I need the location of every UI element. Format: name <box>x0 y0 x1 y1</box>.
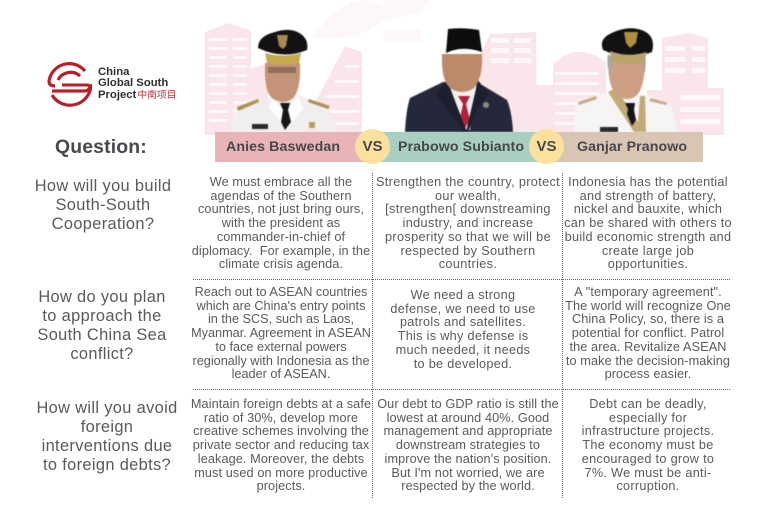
answer: Anies on foreign debts: must used on more productive <box>194 466 368 480</box>
question 2: South China Sea <box>37 326 167 344</box>
heading: Question: Question: <box>55 136 147 158</box>
name: Ganjar Pranowo: Ganjar Pranowo <box>577 139 687 155</box>
answer: Ganjar on foreign debts: encouraged to grow to <box>582 452 714 466</box>
question 1 <box>35 177 171 233</box>
name: Prabowo Subianto: Prabowo Subianto <box>398 139 524 155</box>
answer: Anies on South China Sea: Myanmar. Agreement in ASEAN <box>191 326 371 340</box>
answer: Prabowo on South-South: [strengthen[ downstreaming <box>385 202 551 216</box>
answer: Ganjar on South-South <box>564 175 732 271</box>
answer: Prabowo on South China Sea: defense, we need to use <box>390 302 536 316</box>
question 3: How will you avoid <box>36 399 178 417</box>
question 2: to approach the <box>42 307 162 325</box>
answer: Ganjar on South-South: build economic strength and <box>565 230 731 244</box>
answer: Prabowo on South China Sea: to be developed. <box>414 357 512 371</box>
portrait: Anies Baswedan <box>232 29 336 132</box>
answer: Anies on South China Sea <box>191 285 371 381</box>
logo text: Global South <box>98 77 168 89</box>
answer: Prabowo on foreign debts: Our debt to GDP ratio is still the <box>377 397 559 411</box>
question 2 <box>37 288 167 363</box>
answer: Prabowo on South-South: Strengthen the country, protect <box>376 175 560 189</box>
answer: Ganjar on South-South: nickel and bauxite, which <box>574 202 722 216</box>
question 3 <box>36 399 178 474</box>
question 3: to foreign debts? <box>43 456 171 474</box>
icon: logo mark <box>47 62 92 107</box>
answer: Prabowo on South-South: prosperity so that we will be <box>385 230 551 244</box>
answer: Prabowo on South China Sea: We need a strong <box>411 288 515 302</box>
answer: Anies on South-South <box>192 175 370 271</box>
answer: Ganjar on foreign debts <box>582 397 714 493</box>
name bar: Anies Baswedan <box>215 132 370 162</box>
answer: Prabowo on South-South: industry, and increase <box>403 216 533 230</box>
answer: Prabowo on foreign debts: improve the nation's position. <box>385 452 551 466</box>
name: Anies Baswedan: Anies Baswedan <box>226 139 340 155</box>
portrait: Prabowo Subianto <box>404 27 514 132</box>
answer: Ganjar on South China Sea: China Policy, so, there is a <box>572 312 724 326</box>
answer: Prabowo on foreign debts <box>377 397 559 493</box>
answer: Prabowo on South-South: countries. <box>439 257 497 271</box>
answer: Anies on South China Sea: which are China's entry points <box>197 299 365 313</box>
answer: Ganjar on South China Sea: The world will recognize One <box>565 299 731 313</box>
answer: Anies on South China Sea: Reach out to ASEAN countries <box>195 285 367 299</box>
answer: Anies on South-South: climate crisis agenda. <box>219 257 343 271</box>
answer: Anies on South-South: countries, not just bring ours, <box>198 202 364 216</box>
answer: Prabowo on South China Sea: patrols and satellites. <box>400 315 526 329</box>
answer: Anies on South-South: diplomacy. For example, in the <box>192 244 370 258</box>
answer: Anies on South-South: agendas of the Southern <box>210 189 352 203</box>
answer: Ganjar on South China Sea <box>565 285 731 381</box>
answer: Anies on foreign debts: leakage. Moreover, the debts <box>198 452 364 466</box>
logo text: Project中南项目 <box>98 87 176 101</box>
answer: Anies on foreign debts: private sector and reducing tax <box>193 438 369 452</box>
answer: Ganjar on South China Sea: potential for conflict. Patrol <box>572 326 724 340</box>
answer: Ganjar on South China Sea: to make the decision-making <box>566 354 730 368</box>
answer: Ganjar on South China Sea: A "temporary agreement". <box>574 285 722 299</box>
answer: Anies on South China Sea: to face external powers <box>215 340 347 354</box>
question 1: Cooperation? <box>52 215 154 233</box>
answer: Anies on foreign debts: Maintain foreign debts at a safe <box>191 397 371 411</box>
VS badge left <box>355 129 390 164</box>
answer: Anies on South China Sea: leader of ASEAN. <box>232 367 330 381</box>
answer: Anies on foreign debts: projects. <box>257 479 305 493</box>
name bar: Prabowo Subianto <box>370 132 546 162</box>
question 2: How do you plan <box>38 288 166 306</box>
answer: Anies on foreign debts <box>191 397 371 493</box>
answer: Ganjar on South China Sea: the area. Revitalize ASEAN <box>569 340 727 354</box>
logo text <box>98 66 176 101</box>
answer: Ganjar on South-South: opportunities. <box>608 257 688 271</box>
question 1: How will you build <box>35 177 171 195</box>
name bar: Ganjar Pranowo <box>546 132 703 162</box>
answer: Prabowo on South-South: respected by Southern <box>400 244 536 258</box>
answer: Anies on South China Sea: in the SCS, such as Laos, <box>208 312 354 326</box>
answer: Ganjar on foreign debts: The economy must be <box>582 438 714 452</box>
VS badge right <box>529 129 564 164</box>
answer: Prabowo on foreign debts: management and appropriate <box>383 424 553 438</box>
answer: Ganjar on South-South: can be shared with others to <box>564 216 732 230</box>
answer: Prabowo on foreign debts: downstream strategies to <box>396 438 540 452</box>
answer: Ganjar on South-South: Indonesia has the potential <box>568 175 728 189</box>
question 1: South-South <box>56 196 150 214</box>
answer: Ganjar on foreign debts: 7%. We must be anti- <box>584 466 712 480</box>
answer: Ganjar on South China Sea: process easier. <box>605 367 691 381</box>
answer: Prabowo on foreign debts: But I'm not worried, we are <box>391 466 545 480</box>
answer: Anies on South-South: with the president as <box>222 216 340 230</box>
answer: Prabowo on foreign debts: respected by the world. <box>401 479 535 493</box>
answer: Prabowo on South China Sea <box>390 288 536 371</box>
logo text: China <box>98 66 129 78</box>
question 3: interventions due <box>42 437 172 455</box>
VS badge left: VS <box>362 138 382 155</box>
answer: Prabowo on South China Sea: much needed, it needs <box>396 343 530 357</box>
answer: Anies on South-South: We must embrace all the <box>210 175 352 189</box>
background city skyline <box>205 23 724 135</box>
answer: Anies on foreign debts: creative schemes involving the <box>193 424 369 438</box>
question 2: conflict? <box>70 345 134 363</box>
answer: Ganjar on foreign debts: infrastructure projects. <box>582 424 714 438</box>
answer: Ganjar on South-South: and strength of battery, <box>580 189 716 203</box>
answer: Anies on South China Sea: regionally with Indonesia as the <box>192 354 370 368</box>
logo: China Global South Project <box>47 62 176 107</box>
question 3: foreign <box>81 418 133 436</box>
answer: Prabowo on South-South: our wealth, <box>435 189 501 203</box>
VS badge right: VS <box>536 138 556 155</box>
answer: Prabowo on foreign debts: lowest at around 40%. Good <box>387 411 549 425</box>
answer: Anies on South-South: commander-in-chief of <box>217 230 345 244</box>
answer: Anies on foreign debts: ratio of 30%, develop more <box>204 411 358 425</box>
answer: Prabowo on South China Sea: This is why defense is <box>398 329 528 343</box>
portrait: Ganjar Pranowo <box>573 27 676 132</box>
answer: Ganjar on foreign debts: corruption. <box>616 479 680 493</box>
answer: Ganjar on foreign debts: especially for <box>609 411 687 425</box>
answer: Prabowo on South-South <box>376 175 560 271</box>
answer: Ganjar on foreign debts: Debt can be deadly, <box>589 397 707 411</box>
answer: Ganjar on South-South: create large job <box>602 244 694 258</box>
